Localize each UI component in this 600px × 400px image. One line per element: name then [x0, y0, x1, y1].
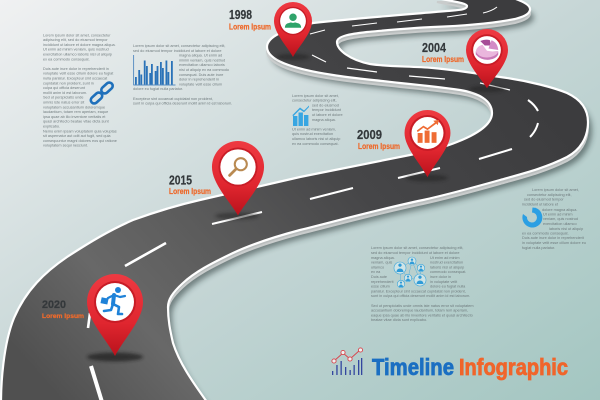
title: Infographic [459, 354, 568, 380]
text block: upper middle: voluptate velit esse cillum [179, 82, 222, 86]
text block: upper middle: sunt in culpa qui officia deserunt mollit anim id est laborum. [133, 102, 232, 106]
text block: lower middle: beatae vitae dicta sunt explicabo. [371, 318, 427, 322]
logo icon: bars and line chart [332, 348, 363, 375]
text block: centre: ex ea commodo consequat. [292, 142, 339, 146]
label: 1998: 1998 [229, 8, 252, 22]
text block: upper middle: magna aliqua. Ut enim ad [179, 54, 222, 58]
text block: left column: incididunt ut labore et dolore magna aliqua. [43, 43, 116, 47]
text block: left column: culpa qui officia deserunt [43, 86, 86, 90]
text block: lower middle: nostrud exercitation [430, 261, 463, 265]
text block: upper middle: dolore eu fugiat nulla pariatur. [133, 87, 183, 91]
text block: lower middle: pariatur. Excepteur sint occaecat cupidatat non proident, [371, 289, 466, 293]
icon: bar chart [134, 55, 176, 85]
text block: upper middle: exercitation ullamco laboris [179, 63, 225, 67]
icon: purple 3D pie [476, 40, 498, 60]
text block: left column: omnis iste natus error sit [43, 100, 85, 104]
label: 2015: 2015 [169, 174, 192, 188]
pin: 1998 [274, 2, 312, 60]
text block: left column: laudantium, totam rem aperiam, eaque [43, 110, 108, 114]
text block: lower middle: irure dolor in [430, 275, 451, 279]
label: 2009: 2009 [357, 128, 382, 142]
text block: centre: ut labore et dolore [312, 113, 343, 117]
label: 2009: Lorem Ipsum [358, 142, 400, 151]
text block: lower middle: laboris nisi ut aliquip [430, 265, 464, 269]
text block: left column: Nemo enim ipsam voluptatem quia voluptas [43, 129, 117, 133]
text block: left column: adipiscing elit, sed do eiusmod tempor [43, 38, 108, 42]
text block: left column: consequuntur magni dolores eos qui ratione [43, 139, 117, 143]
text block: lower middle: sed do eiusmod tempor incididunt ut labore et dolore [371, 251, 459, 255]
text block: lower middle: accusantium doloremque laudantium, totam rem aperiam, [371, 309, 468, 313]
text block: left column: Sed ut perspiciatis unde [43, 96, 84, 100]
pin: 2015 [212, 141, 264, 220]
text block: lower middle: esse cillum [371, 285, 390, 289]
text block: lower middle: magna aliqua. [371, 256, 395, 260]
text block: lower middle: Ut enim ad minim [430, 256, 460, 260]
text block: centre: ullamco laboris nisi ut aliquip [292, 137, 340, 141]
text block: lower middle: sunt in culpa qui officia deserunt mollit anim id est laborum. [371, 294, 470, 298]
label: 2004: 2004 [422, 41, 446, 55]
text block: lower middle: veniam, quis [371, 261, 392, 265]
pin: 2020 [87, 274, 143, 362]
text block: left column: explicabo. [43, 124, 60, 128]
text block: lower middle: Sed ut perspiciatis unde omnis iste natus error sit voluptatem [371, 304, 474, 308]
text block: lower middle: ex ea [371, 270, 381, 274]
text block: lower middle: reprehenderit [371, 280, 395, 284]
text block: upper middle: Lorem ipsum dolor sit amet, consectetur adipiscing elit, [133, 44, 225, 48]
text block: upper middle: nisi ut aliquip ex ea commodo [179, 68, 229, 72]
text block: centre: quis nostrud exercitation [292, 132, 333, 136]
text block: left column: Duis aute irure dolor in reprehenderit in [43, 67, 109, 71]
label: 2004: Lorem Ipsum [422, 55, 464, 64]
label: 2020: 2020 [42, 299, 66, 311]
icon: chain link [89, 81, 114, 105]
text block: lower right: dolore magna aliqua. [542, 208, 577, 212]
text block: centre: Lorem ipsum dolor sit amet, [292, 94, 339, 98]
text block: lower right: fugiat nulla pariatur. [522, 246, 555, 250]
text block: lower right: consectetur adipiscing elit, [527, 193, 572, 197]
text block: centre: Ut enim ad minim veniam, [292, 127, 336, 131]
icon: orange growth bars [417, 120, 439, 143]
label: 2009 [357, 128, 400, 151]
text block: upper middle: consequat. Duis aute irure [179, 73, 223, 77]
text block: lower middle: Duis aute [371, 275, 387, 279]
text block: left column: voluptatem sequi nesciunt. [43, 144, 88, 148]
text block: lower right: exercitation ullamco [543, 222, 577, 226]
text block: upper middle: Excepteur sint occaecat cupidatat non proident, [133, 97, 213, 101]
pin: 2004 [466, 29, 508, 92]
text block: lower right: incididunt ut labore et [522, 202, 559, 206]
text block: lower right: Lorem ipsum dolor sit amet, [532, 188, 579, 192]
text block: left column: ipsa quae ab illo inventore veritatis et [43, 115, 106, 119]
label: 2020: Lorem Ipsum [42, 313, 84, 320]
label: 2015: Lorem Ipsum [169, 187, 211, 196]
text block: lower middle: ullamco [371, 265, 384, 269]
title [372, 354, 568, 380]
text block: centre: magna aliqua. [312, 118, 336, 122]
icon: blue pie [522, 208, 542, 227]
label: 2020 [42, 299, 84, 320]
icon: people network [394, 257, 426, 288]
pin: 2009 [405, 110, 450, 182]
label: 2015 [169, 174, 211, 196]
text block: left column: cupidatat non proident, sunt in [43, 81, 94, 85]
text block: lower middle: commodo consequat. [430, 270, 466, 274]
text block: lower right: veniam, quis nostrud [543, 217, 578, 221]
text block: upper middle: sed do eiusmod tempor incididunt ut labore et dolore [133, 49, 221, 53]
label: 1998: Lorem Ipsum [229, 22, 271, 32]
label: 2004 [422, 41, 464, 64]
text block: left column: Ut enim ad minim veniam, quis nostrud [43, 48, 109, 52]
text block: upper middle: minim veniam, quis nostrud [179, 58, 225, 62]
text block: lower middle: eaque ipsa quae ab illo inventore veritatis et quasi architecto [371, 313, 473, 317]
text block: lower middle: dolore eu fugiat nulla [430, 285, 466, 289]
text block: left column: Lorem ipsum dolor sit amet, consectetur [43, 33, 111, 37]
text block: lower right: in voluptate velit esse cillum dolore eu [522, 241, 586, 245]
road centre dashes [88, 7, 538, 400]
text block: left column: exercitation ullamco laboris nisi ut aliquip [43, 52, 112, 56]
text block: left column: mollit anim id est laborum. [43, 91, 87, 95]
text block: lower right: Ut enim ad minim [543, 212, 573, 216]
text block: left column: ex ea commodo consequat. [43, 57, 90, 61]
text block: lower middle: in voluptate velit [430, 280, 458, 284]
text block: centre: tempor incididunt [312, 108, 342, 112]
icon: running man with briefcase [100, 287, 125, 314]
text block: lower middle: Lorem ipsum dolor sit amet, consectetur adipiscing elit, [371, 246, 463, 250]
icon: growth chart [292, 106, 309, 126]
text block: lower right: Duis aute irure dolor in reprehenderit [522, 236, 585, 240]
text block: left column: nulla pariatur. Excepteur sint occaecat [43, 76, 108, 80]
text block: lower right: sed do eiusmod tempor [524, 198, 564, 202]
text block: centre: consectetur adipiscing elit, [292, 99, 337, 103]
text block: left column: quasi architecto beatae vitae dicta sunt [43, 120, 110, 124]
label: 1998 [229, 8, 271, 32]
text block: left column: voluptate velit esse cillum dolore eu fugiat [43, 72, 114, 76]
icon: magnifier [230, 158, 247, 175]
icon: person [285, 14, 301, 28]
title: Timeline [372, 354, 454, 380]
text block: lower right: laboris nisi ut aliquip [549, 227, 583, 231]
text block: lower right: ex ea commodo consequat. [522, 232, 569, 236]
text block: centre: sed do eiusmod [312, 103, 339, 107]
text block: left column: voluptatem accusantium doloremque [43, 105, 105, 109]
text block: upper middle: dolor in reprehenderit in [179, 78, 219, 82]
text block: left column: sit aspernatur aut odit aut fugit, sed quia [43, 134, 111, 138]
